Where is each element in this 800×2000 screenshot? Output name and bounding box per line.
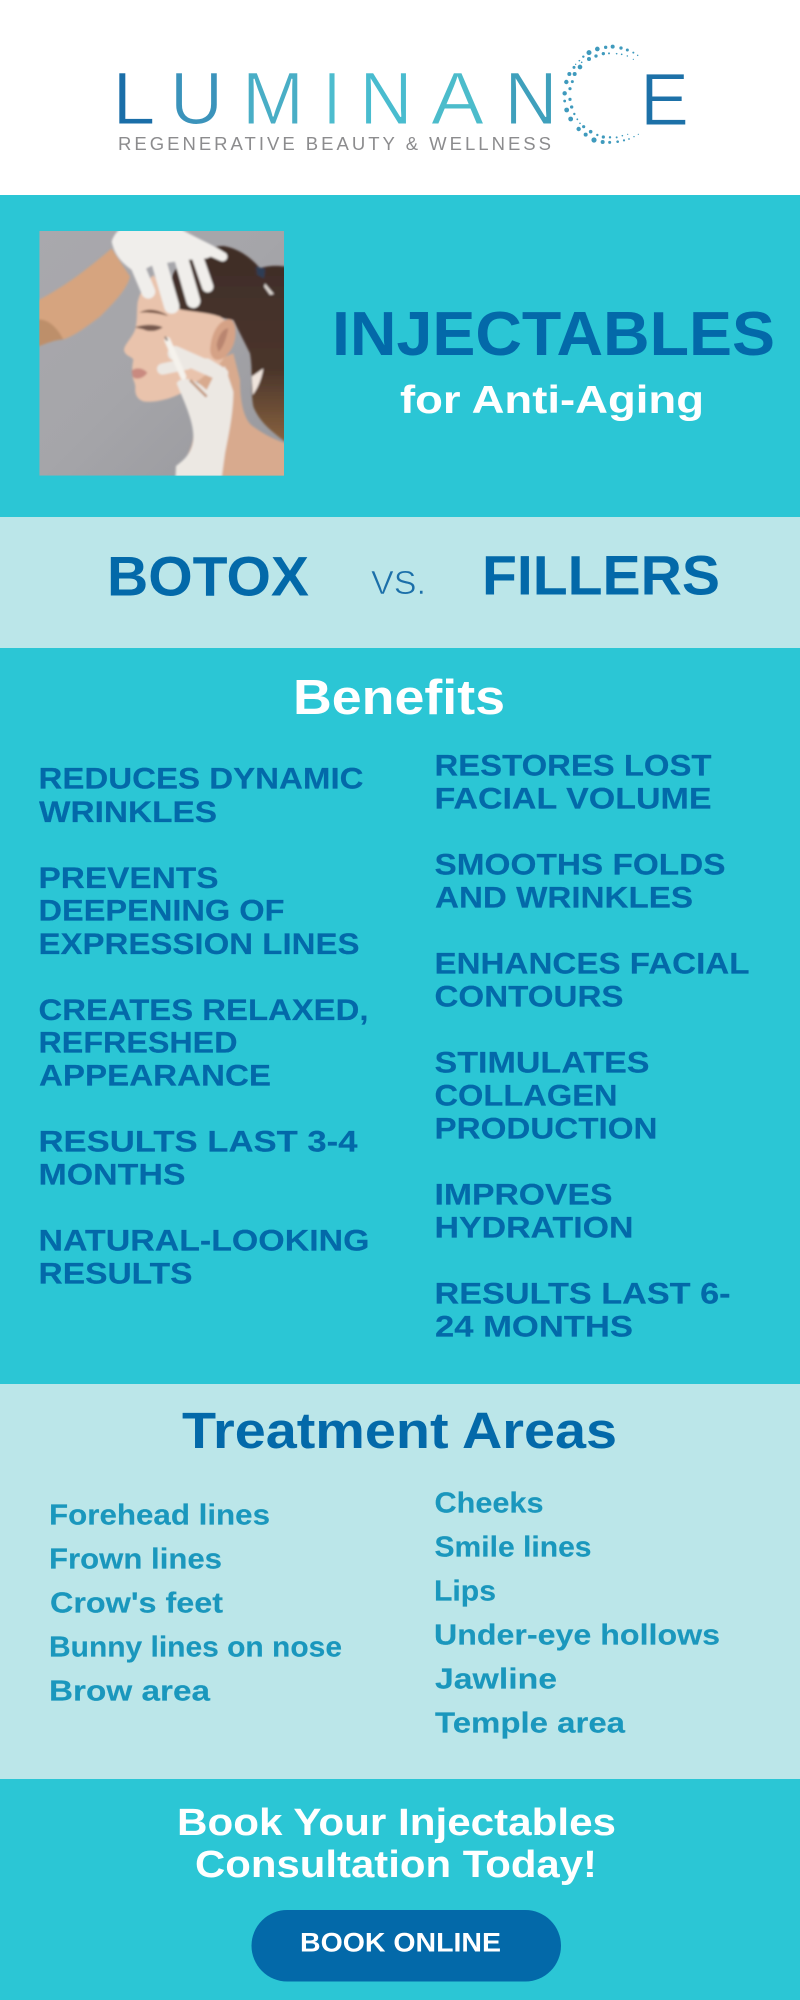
heading: Benefits: Benefits: [293, 671, 505, 725]
fillers treatment list: [434, 1488, 720, 1740]
logo wordmark LUMINANCE: M: [242, 57, 304, 140]
fillers benefits column: [434, 750, 750, 1344]
fillers treatment list: Temple area: [435, 1708, 626, 1740]
panel: hero: [0, 195, 800, 517]
botox treatment list: [49, 1500, 342, 1708]
label: vs.: VS.: [371, 564, 426, 601]
benefit: natural-looking results: RESULTS: [38, 1258, 192, 1291]
benefit: prevents deepening of expression lines: PREVENTS: [38, 862, 218, 895]
logo wordmark LUMINANCE: N: [504, 57, 558, 140]
photo: injection treatment: [39, 231, 284, 476]
benefit: stimulates collagen production: STIMULATES: [434, 1047, 650, 1080]
benefit: restores lost facial volume: FACIAL VOLUME: [434, 783, 712, 816]
heading: book your injectables consultation today: Book Your Injectables: [177, 1802, 616, 1844]
fillers treatment list: Jawline: [435, 1664, 557, 1696]
benefit: restores lost facial volume: [434, 750, 712, 816]
benefit: prevents deepening of expression lines: DEEPENING OF: [38, 895, 284, 928]
benefit: smooths folds and wrinkles: AND WRINKLES: [435, 882, 693, 915]
benefit: creates relaxed, refreshed appearance: APPEARANCE: [39, 1060, 271, 1093]
benefit: reduces dynamic wrinkles: WRINKLES: [39, 796, 217, 829]
benefit: improves hydration: IMPROVES: [434, 1179, 612, 1212]
benefit: enhances facial contours: ENHANCES FACIAL: [434, 948, 750, 981]
logo tagline: REGENERATIVE BEAUTY & WELLNESS: [118, 133, 551, 154]
heading: Treatment Areas: Treatment Areas: [182, 1402, 617, 1459]
benefit: reduces dynamic wrinkles: [38, 763, 364, 829]
benefit: prevents deepening of expression lines: EXPRESSION LINES: [38, 928, 360, 961]
benefit: results last 3-4 months: [38, 1126, 358, 1192]
botox treatment list: Bunny lines on nose: [49, 1632, 342, 1664]
logo wordmark LUMINANCE: U: [170, 57, 223, 140]
heading: book your injectables consultation today: [177, 1802, 616, 1886]
fillers treatment list: Under-eye hollows: [434, 1620, 720, 1652]
panel: benefits: [0, 648, 800, 1384]
benefit: creates relaxed, refreshed appearance: REFRESHED: [38, 1027, 238, 1060]
logo wordmark LUMINANCE: I: [323, 57, 341, 140]
button: book online: BOOK ONLINE: [300, 1928, 501, 1958]
benefit: smooths folds and wrinkles: SMOOTHS FOLDS: [434, 849, 726, 882]
benefit: results last 3-4 months: MONTHS: [38, 1159, 186, 1192]
fillers treatment list: Lips: [434, 1576, 496, 1608]
panel: call to action: [0, 1779, 800, 2000]
benefit: improves hydration: [434, 1179, 634, 1245]
botox treatment list: Crow's feet: [50, 1588, 223, 1620]
benefit: results last 3-4 months: RESULTS LAST 3-4: [38, 1126, 358, 1159]
benefit: creates relaxed, refreshed appearance: [38, 994, 368, 1093]
botox treatment list: Forehead lines: [49, 1500, 270, 1532]
benefit: enhances facial contours: [434, 948, 750, 1014]
logo wordmark LUMINANCE: L: [112, 57, 155, 140]
logo wordmark LUMINANCE: E: [640, 58, 689, 141]
panel: treatment areas: [0, 1384, 800, 1779]
fillers treatment list: Cheeks: [434, 1488, 544, 1520]
logo wordmark LUMINANCE: [112, 57, 689, 141]
botox treatment list: Brow area: [49, 1676, 211, 1708]
button: book online: [252, 1910, 561, 1982]
benefit: prevents deepening of expression lines: [38, 862, 360, 961]
benefit: stimulates collagen production: PRODUCTION: [434, 1113, 658, 1146]
fillers treatment list: Smile lines: [434, 1532, 592, 1564]
benefit: restores lost facial volume: RESTORES LOST: [434, 750, 712, 783]
benefit: natural-looking results: NATURAL-LOOKING: [38, 1225, 370, 1258]
botox treatment list: Frown lines: [49, 1544, 222, 1576]
benefit: reduces dynamic wrinkles: REDUCES DYNAMIC: [38, 763, 364, 796]
panel: logo header: [0, 0, 800, 195]
benefit: stimulates collagen production: [434, 1047, 658, 1146]
logo wordmark LUMINANCE: N: [360, 57, 412, 140]
panel: botox vs fillers: [0, 517, 800, 648]
benefit: stimulates collagen production: COLLAGEN: [434, 1080, 618, 1113]
benefit: results last 6-24 months: 24 MONTHS: [435, 1311, 633, 1344]
benefit: results last 6-24 months: [434, 1278, 730, 1344]
benefit: enhances facial contours: CONTOURS: [434, 981, 624, 1014]
benefit: creates relaxed, refreshed appearance: CREATES RELAXED,: [38, 994, 368, 1027]
heading: book your injectables consultation today: Consultation Today!: [195, 1844, 597, 1886]
subtitle: for Anti-Aging: for Anti-Aging: [400, 379, 704, 422]
logo wordmark LUMINANCE: A: [431, 57, 485, 140]
heading: FILLERS: FILLERS: [482, 544, 720, 606]
benefit: natural-looking results: [38, 1225, 370, 1291]
benefit: improves hydration: HYDRATION: [434, 1212, 634, 1245]
benefit: smooths folds and wrinkles: [434, 849, 726, 915]
benefit: results last 6-24 months: RESULTS LAST 6-: [434, 1278, 730, 1311]
logo dotted letter C: [562, 45, 639, 144]
title: INJECTABLES: INJECTABLES: [332, 300, 775, 369]
botox benefits column: [38, 763, 370, 1291]
heading: BOTOX: BOTOX: [107, 544, 309, 608]
